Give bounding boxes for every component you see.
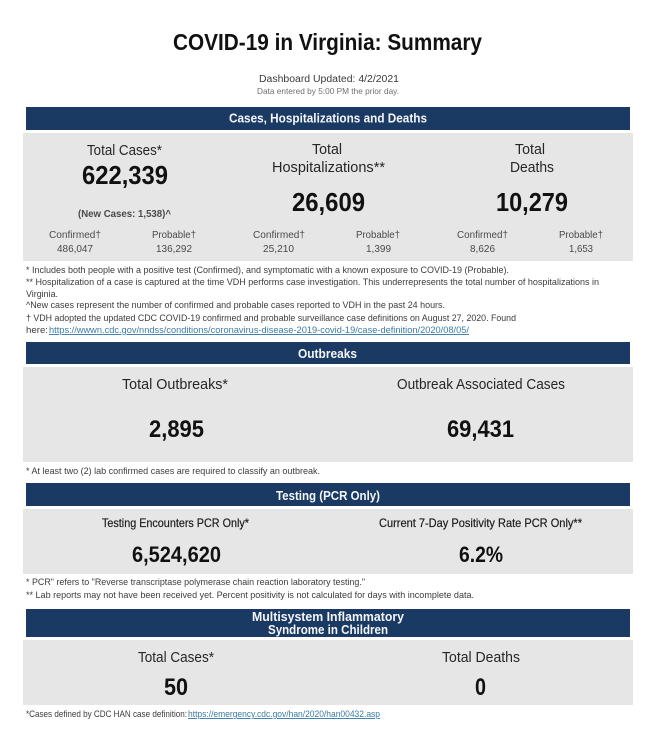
MIS-C total deaths stat: 0 xyxy=(475,674,486,701)
total outbreaks stat: Total Outbreaks* xyxy=(122,377,228,393)
footnotes: cases, hospitalizations and deaths xyxy=(26,264,599,335)
panel: multisystem inflammatory syndrome header xyxy=(26,609,630,637)
panel: outbreaks stats xyxy=(23,367,633,462)
total deaths stat: Total xyxy=(515,142,545,158)
total hospitalizations stat: 26,609 xyxy=(292,187,365,217)
MIS-C total deaths stat: Total Deaths xyxy=(442,650,520,666)
footnotes: cases, hospitalizations and deaths: † VDH adopted the updated CDC COVID-19 confirmed and probable surveillance case definitions on August 27, 2020. Found xyxy=(26,312,516,323)
total deaths stat: 8,626 xyxy=(470,244,495,255)
panel: cases, hospitalizations and deaths stats xyxy=(23,133,633,261)
total deaths stat xyxy=(457,142,603,255)
footnote: outbreaks: * At least two (2) lab confirmed cases are required to classify an outbreak. xyxy=(26,465,320,476)
MIS-C total cases stat: Total Cases* xyxy=(138,650,214,666)
total cases stat: (New Cases: 1,538)^ xyxy=(78,208,171,220)
panel: multisystem inflammatory syndrome header: Multisystem Inflammatory xyxy=(252,609,405,624)
testing encounters stat: Testing Encounters PCR Only* xyxy=(102,516,249,530)
total cases stat: Probable† xyxy=(152,230,196,241)
outbreak associated cases stat: Outbreak Associated Cases xyxy=(397,377,565,393)
total cases stat: Total Cases* xyxy=(87,143,162,159)
panel: testing stats xyxy=(23,509,633,574)
testing encounters stat: 6,524,620 xyxy=(132,542,221,567)
testing encounters stat xyxy=(102,516,249,567)
footnotes: testing: ** Lab reports may not have been received yet. Percent positivity is not calculated for days with incomplete data. xyxy=(26,589,474,600)
total deaths stat: Confirmed† xyxy=(457,230,508,241)
panel: testing header xyxy=(26,483,630,506)
footnotes: cases, hospitalizations and deaths: ** Hospitalization of a case is captured at the time VDH performs case investigation. This underrepresents the total number of hospitalizations in xyxy=(26,276,599,287)
panel: testing header: Testing (PCR Only) xyxy=(276,488,380,503)
total hospitalizations stat: Probable† xyxy=(356,230,400,241)
panel: cases, hospitalizations and deaths header xyxy=(26,107,630,130)
positivity rate stat xyxy=(379,516,582,567)
total deaths stat: Probable† xyxy=(559,230,603,241)
footnote: MIS-C case definition xyxy=(26,708,380,719)
dashboard update date: Data entered by 5:00 PM the prior day. xyxy=(257,86,399,96)
total hospitalizations stat: Total xyxy=(312,142,342,158)
outbreak associated cases stat xyxy=(397,377,565,443)
total outbreaks stat xyxy=(122,377,228,443)
total hospitalizations stat xyxy=(253,142,400,255)
footnotes: cases, hospitalizations and deaths: ^New cases represent the number of confirmed and probable cases reported to VDH in the past 24 hours. xyxy=(26,299,445,310)
panel: multisystem inflammatory syndrome stats xyxy=(23,640,633,705)
MIS-C total cases stat xyxy=(138,650,214,701)
MIS-C total deaths stat xyxy=(442,650,520,701)
footnote: MIS-C case definition: https://emergency.cdc.gov/han/2020/han00432.asp xyxy=(188,708,380,719)
footnotes: cases, hospitalizations and deaths: * Includes both people with a positive test (Confirmed), and symptomatic with a known exposure to COVID-19 (Probable). xyxy=(26,264,509,275)
MIS-C total cases stat: 50 xyxy=(164,674,188,701)
title: COVID-19 in Virginia: Summary xyxy=(173,29,482,55)
footnotes: testing xyxy=(26,576,474,600)
total hospitalizations stat: 25,210 xyxy=(263,244,294,255)
panel: outbreaks header xyxy=(26,342,630,364)
panel: multisystem inflammatory syndrome header: Syndrome in Children xyxy=(268,622,388,637)
total cases stat: 136,292 xyxy=(156,244,192,255)
total deaths stat: Deaths xyxy=(510,160,554,176)
footnote: MIS-C case definition: *Cases defined by CDC HAN case definition: xyxy=(26,708,187,719)
footnotes: cases, hospitalizations and deaths: https://wwwn.cdc.gov/nndss/conditions/coronavirus-disease-2019-covid-19/case-definition/2020/08/05/ xyxy=(49,324,469,335)
total cases stat: 622,339 xyxy=(82,160,168,190)
footnotes: testing: * PCR" refers to "Reverse transcriptase polymerase chain reaction laboratory testing." xyxy=(26,576,365,587)
total cases stat: Confirmed† xyxy=(49,230,101,241)
total deaths stat: 1,653 xyxy=(569,244,593,255)
total deaths stat: 10,279 xyxy=(496,187,568,217)
dashboard update date: Dashboard Updated: 4/2/2021 xyxy=(259,74,399,85)
dashboard update date xyxy=(257,74,399,96)
panel: outbreaks header: Outbreaks xyxy=(298,346,357,361)
total hospitalizations stat: 1,399 xyxy=(366,244,391,255)
total hospitalizations stat: Hospitalizations** xyxy=(272,160,385,176)
footnotes: cases, hospitalizations and deaths: here: xyxy=(26,324,48,335)
panel: cases, hospitalizations and deaths header: Cases, Hospitalizations and Deaths xyxy=(229,110,427,126)
footnotes: cases, hospitalizations and deaths: Virginia. xyxy=(26,288,58,299)
total outbreaks stat: 2,895 xyxy=(149,416,204,443)
outbreak associated cases stat: 69,431 xyxy=(447,416,514,443)
positivity rate stat: 6.2% xyxy=(459,542,503,567)
total cases stat xyxy=(49,143,196,255)
total cases stat: 486,047 xyxy=(57,244,93,255)
total hospitalizations stat: Confirmed† xyxy=(253,230,305,241)
positivity rate stat: Current 7-Day Positivity Rate PCR Only** xyxy=(379,516,582,530)
